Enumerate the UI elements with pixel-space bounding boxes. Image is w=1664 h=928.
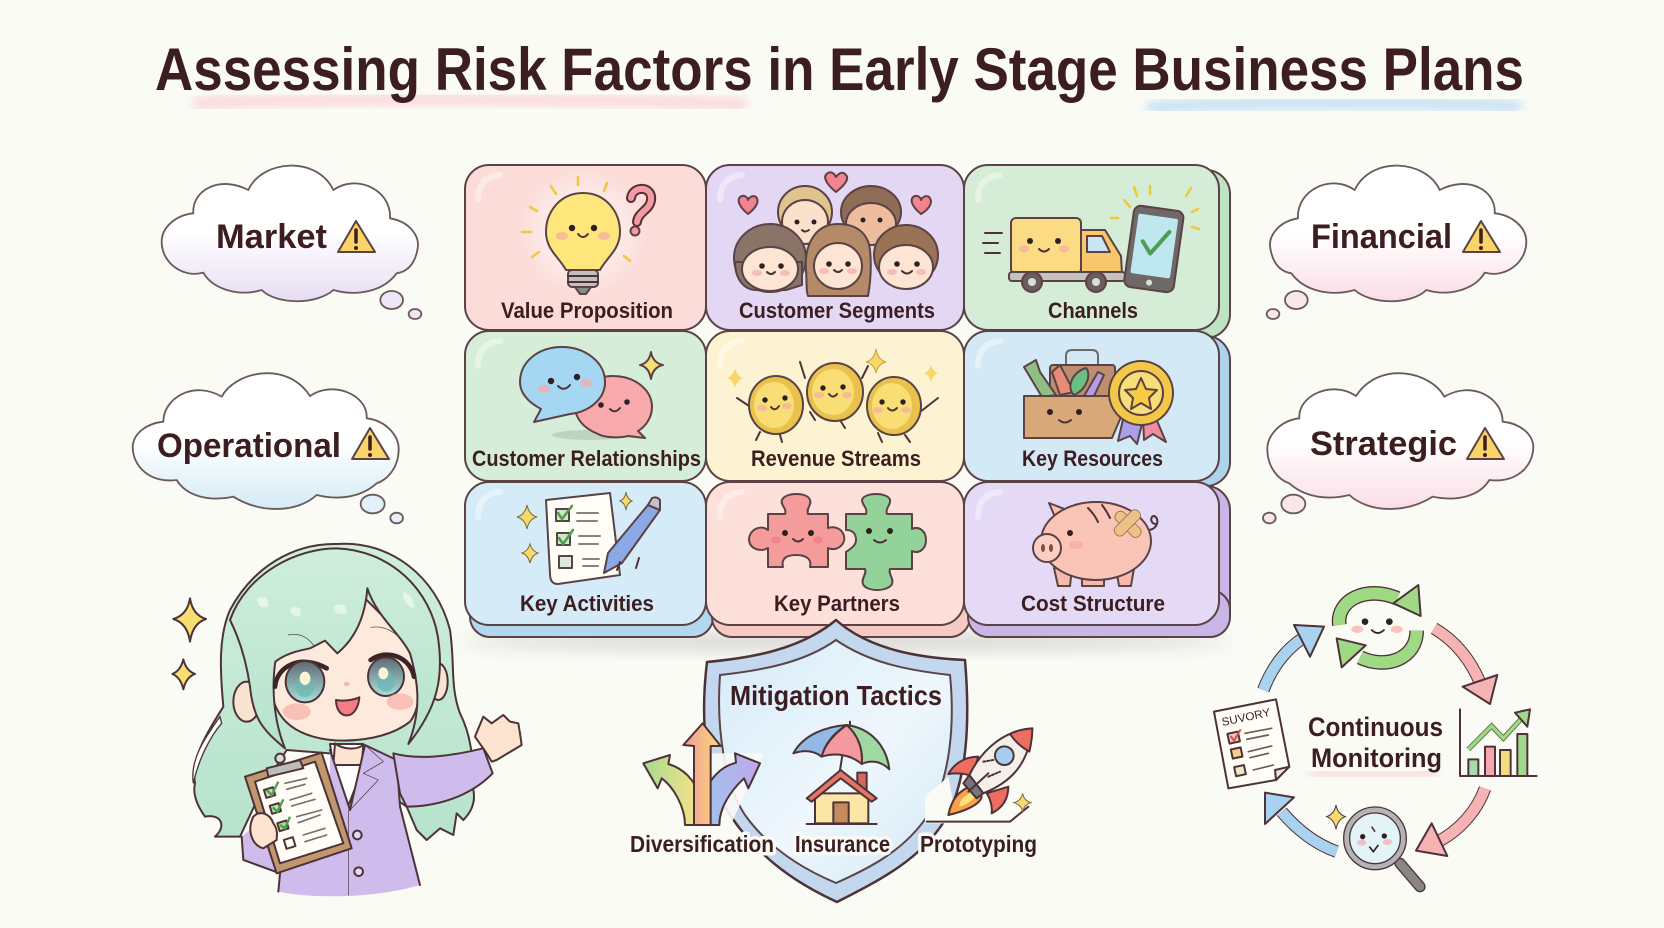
icon: rocket launch [925,728,1032,823]
icon: warning triangle [1467,428,1504,459]
thought bubble: Market [162,166,421,319]
arrow: blue, survey to refresh [1263,625,1324,690]
label: Value Proposition: Value Proposition [501,298,673,323]
chart: rising bars with trend arrow [1460,709,1537,776]
panel: Key Activities [465,482,706,625]
label: Key Resources: Key Resources [1022,446,1163,471]
back layers of the blocks [470,170,1230,637]
icon: three dancing coins [727,349,938,442]
outstretched arm and hand [393,715,522,807]
panel: Channels [964,165,1219,330]
label: Financial: Financial [1311,218,1452,256]
face [269,597,419,741]
fringe hair [230,548,440,748]
panel: Revenue Streams [706,331,964,481]
label: Monitoring: Monitoring [1311,743,1442,773]
label: Channels: Channels [1048,298,1138,323]
shield: Mitigation Tactics [630,620,1037,902]
icon: toolbox with award ribbon [1024,350,1173,444]
title text: Assessing Risk Factors in Early Stage Business Plans [155,36,1524,103]
label: Diversification: Diversification [630,831,774,857]
neck and shirt [330,744,363,810]
icon: checklist and pen [517,492,660,584]
hand holding clipboard [250,813,277,848]
panel: Key Resources [964,331,1219,481]
icon: delivery truck and smartphone [983,186,1199,293]
lab coat body [242,745,420,896]
icon: survey sheet [1214,699,1289,788]
brows, nose, cheeks [283,627,413,720]
label: Continuous: Continuous [1308,712,1443,742]
business model canvas grid [460,165,1230,651]
mouth [336,697,359,715]
eyes [275,655,414,702]
panel: Key Partners [706,482,964,625]
label: Cost Structure: Cost Structure [1021,591,1165,616]
icon: warning triangle [1463,221,1500,252]
underline: pink brush [1312,773,1435,775]
title [155,36,1524,107]
arrow: pink, refresh to chart [1434,628,1497,704]
clipboard with checklist [245,753,352,873]
title underline: pink brush [198,99,742,104]
label: Insurance: Insurance [795,831,890,857]
panel: Cost Structure [964,482,1219,625]
label: Strategic: Strategic [1310,425,1457,463]
icon: light bulb with question mark [517,166,651,298]
label: Market: Market [216,218,327,256]
thought bubble: Operational [133,373,403,523]
icon: piggy bank with bandage [1033,502,1157,586]
label: Key Activities: Key Activities [520,591,654,616]
character: green-haired girl with clipboard [172,544,522,896]
icon: green refresh arrows with face [1337,585,1421,667]
panel: Customer Relationships [465,331,706,481]
thought bubble: Strategic [1263,373,1533,523]
icon: survey sheet: SUVORY [1221,707,1272,729]
icon: group of five people with hearts [734,172,938,296]
icon: magnifying glass [1347,810,1420,887]
sparkles [172,598,206,689]
hair back [194,544,474,840]
icon: warning triangle [338,221,375,252]
ears [233,663,448,722]
label: Customer Relationships: Customer Relationships [472,446,701,471]
icon: sparkle [1327,805,1345,829]
icon: two puzzle pieces [749,494,926,590]
continuous monitoring cycle [1214,585,1537,887]
label: Revenue Streams: Revenue Streams [751,446,921,471]
icon: warning triangle [352,428,389,459]
panel: Customer Segments [706,165,964,330]
icon: rainbow diversification arrows [640,723,763,827]
label: Prototyping: Prototyping [920,831,1037,857]
label: Key Partners: Key Partners [774,591,900,616]
icon: umbrella over house [793,722,889,824]
thought bubble: Financial [1267,166,1526,319]
heading: Mitigation Tactics: Mitigation Tactics [730,680,942,711]
white hair highlight on left [193,717,222,783]
title underline: blue brush [1152,103,1516,107]
arrow: blue, magnifier to survey [1265,793,1337,852]
icon: two chat bubbles [520,347,663,440]
label: Operational: Operational [157,427,341,465]
label: Customer Segments: Customer Segments [739,298,935,323]
panel: Value Proposition [465,165,706,330]
arrow: pink, chart to magnifier [1416,788,1485,856]
